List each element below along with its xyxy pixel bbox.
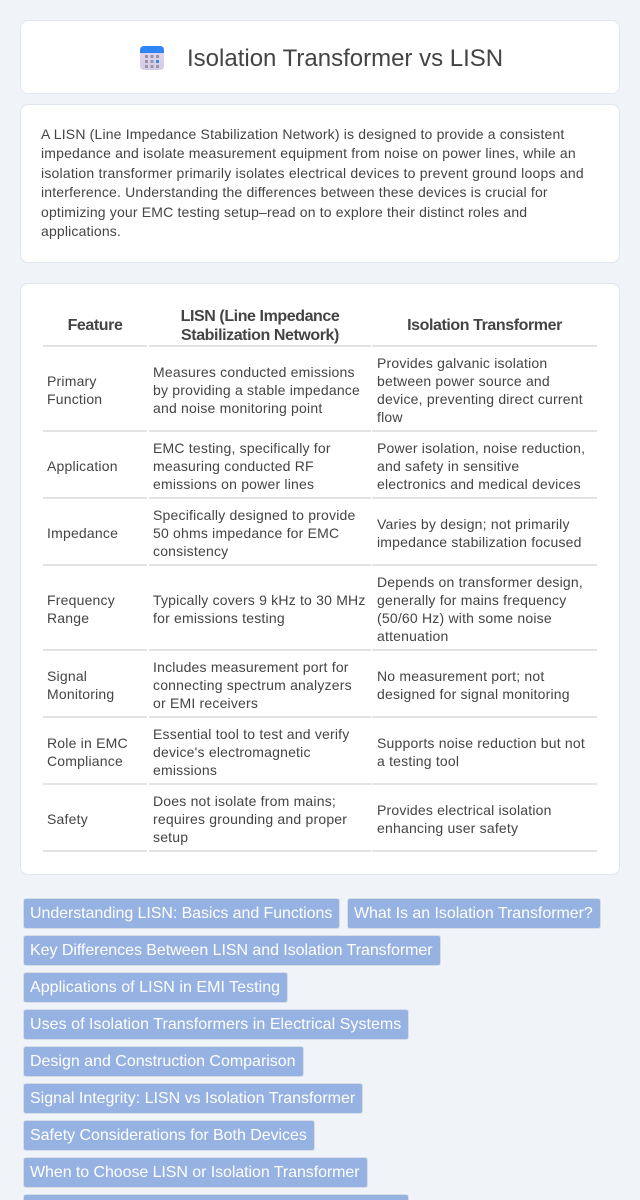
row: primary function: Provides galvanic isolation — [377, 355, 547, 371]
row: role in EMC compliance: emissions — [153, 762, 217, 778]
row: application — [43, 440, 597, 499]
table header: Stabilization Network) — [181, 327, 339, 344]
topic tags — [23, 898, 601, 1200]
row: primary function: device, preventing direct current — [377, 391, 583, 407]
row: application: and safety in sensitive — [377, 458, 519, 474]
row: signal monitoring: designed for signal monitoring — [377, 686, 570, 702]
row: frequency range: Range — [47, 610, 89, 626]
tag: partially visible, text cut off — [23, 1194, 409, 1200]
tag: Signal Integrity: LISN vs Isolation Transformer — [30, 1090, 355, 1107]
row: application: EMC testing, specifically for — [153, 440, 331, 456]
tag — [23, 1157, 368, 1188]
text block: intro paragraph: isolation transformer primarily isolates electrical devices to prevent ground loops and — [41, 165, 584, 181]
tag — [23, 972, 288, 1003]
row: frequency range — [43, 574, 597, 651]
row: safety: setup — [153, 829, 188, 845]
tag — [23, 1046, 304, 1077]
tag: When to Choose LISN or Isolation Transformer — [30, 1164, 360, 1181]
row: primary function — [43, 355, 597, 432]
text block: intro paragraph: interference. Understanding the differences between these devices is crucial for — [41, 184, 548, 200]
row: role in EMC compliance: Essential tool to test and verify — [153, 726, 349, 742]
text block: intro paragraph: applications. — [41, 223, 121, 239]
row: role in EMC compliance: Role in EMC — [47, 735, 128, 751]
row: impedance: 50 ohms impedance for EMC — [153, 525, 339, 541]
row: safety: requires grounding and proper — [153, 811, 347, 827]
row: signal monitoring: connecting spectrum analyzers — [153, 677, 352, 693]
row: primary function: by providing a stable impedance — [153, 382, 360, 398]
row: signal monitoring: No measurement port; not — [377, 668, 544, 684]
panel: comparison table — [20, 283, 620, 875]
tag: Uses of Isolation Transformers in Electrical Systems — [30, 1016, 401, 1033]
table header: Isolation Transformer — [407, 317, 562, 334]
row: impedance: impedance stabilization focused — [377, 534, 582, 550]
row: frequency range: Frequency — [47, 592, 115, 608]
tag: Key Differences Between LISN and Isolation Transformer — [30, 942, 433, 959]
row: role in EMC compliance: Compliance — [47, 753, 123, 769]
tag: Understanding LISN: Basics and Functions — [30, 905, 332, 922]
panel: introduction — [20, 104, 620, 263]
row: frequency range: generally for mains frequency — [377, 592, 566, 608]
row: safety — [43, 793, 597, 852]
row: safety: Does not isolate from mains; — [153, 793, 336, 809]
text block: intro paragraph: A LISN (Line Impedance Stabilization Network) is designed to provide a consistent — [41, 126, 564, 142]
panel: title header — [20, 20, 620, 94]
row: primary function: and noise monitoring point — [153, 400, 322, 416]
tag — [347, 898, 601, 929]
row: frequency range: attenuation — [377, 628, 448, 644]
row: impedance: Varies by design; not primarily — [377, 516, 570, 532]
row: application: Application — [47, 458, 118, 474]
table header: LISN (Line Impedance — [181, 308, 339, 325]
row: role in EMC compliance: Supports noise reduction but not — [377, 735, 585, 751]
row: role in EMC compliance — [43, 726, 597, 785]
row: signal monitoring: or EMI receivers — [153, 695, 258, 711]
row: impedance: Specifically designed to provide — [153, 507, 356, 523]
row: impedance: Impedance — [47, 525, 118, 541]
row: safety: Provides electrical isolation — [377, 802, 552, 818]
row: role in EMC compliance: a testing tool — [377, 753, 459, 769]
row: frequency range: Depends on transformer design, — [377, 574, 583, 590]
tag — [23, 1009, 409, 1040]
row: primary function: Function — [47, 391, 102, 407]
row: application: emissions on power lines — [153, 476, 314, 492]
row: impedance — [43, 507, 597, 566]
row: primary function: Primary — [47, 373, 97, 389]
row: frequency range: for emissions testing — [153, 610, 285, 626]
text block: intro paragraph — [41, 126, 584, 239]
tag: Applications of LISN in EMI Testing — [30, 979, 280, 996]
row: signal monitoring: Signal — [47, 668, 87, 684]
row: impedance: consistency — [153, 543, 228, 559]
row: frequency range: Typically covers 9 kHz to 30 MHz — [153, 592, 366, 608]
row: primary function: flow — [377, 409, 403, 425]
text block: intro paragraph: impedance and isolate measurement equipment from noise on power lines, while an — [41, 145, 576, 161]
table header: Feature — [68, 317, 122, 334]
title: Isolation Transformer vs LISN — [187, 45, 503, 72]
row: safety: enhancing user safety — [377, 820, 518, 836]
tag — [23, 1120, 315, 1151]
row: signal monitoring: Includes measurement port for — [153, 659, 349, 675]
row: signal monitoring: Monitoring — [47, 686, 114, 702]
row: signal monitoring — [43, 659, 597, 718]
tag: Safety Considerations for Both Devices — [30, 1127, 307, 1144]
row: application: measuring conducted RF — [153, 458, 314, 474]
row: primary function: Measures conducted emissions — [153, 364, 355, 380]
tag: Design and Construction Comparison — [30, 1053, 296, 1070]
row: application: electronics and medical devices — [377, 476, 581, 492]
tag — [23, 935, 441, 966]
text block: intro paragraph: optimizing your EMC testing setup–read on to explore their distinct roles and — [41, 204, 527, 220]
row: role in EMC compliance: device's electromagnetic — [153, 744, 311, 760]
row: application: Power isolation, noise reduction, — [377, 440, 585, 456]
row: primary function: between power source and — [377, 373, 550, 389]
row: frequency range: (50/60 Hz) with some noise — [377, 610, 552, 626]
tag — [23, 898, 340, 929]
row: safety: Safety — [47, 811, 88, 827]
table header — [43, 308, 597, 347]
tag: What Is an Isolation Transformer? — [354, 905, 593, 922]
tag — [23, 1083, 363, 1114]
icon: calendar — [140, 46, 164, 70]
